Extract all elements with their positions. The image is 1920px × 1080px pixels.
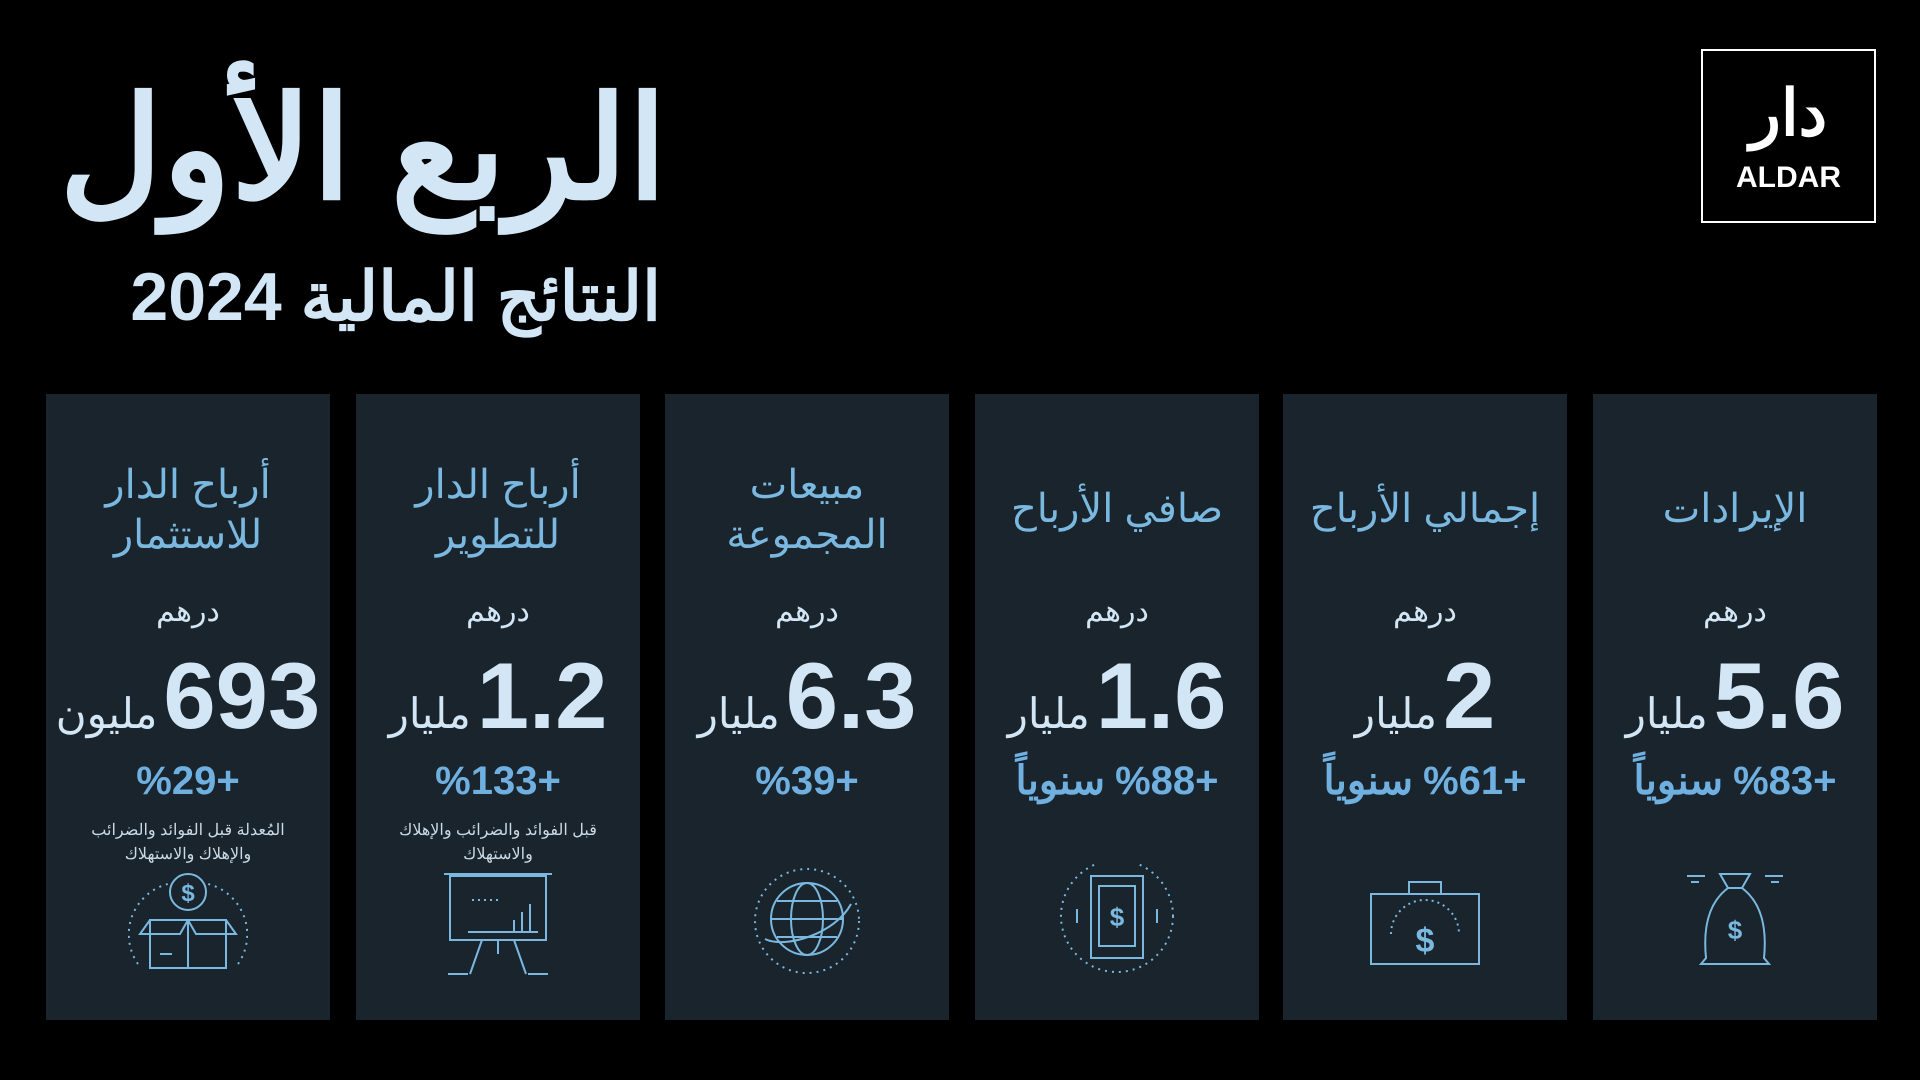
value: مليار [1355,690,1437,737]
icon: box with coin: $ [181,880,195,907]
growth [1322,751,1526,804]
card title: أرباح الدار [415,463,581,507]
icon: globe [754,868,860,974]
card title [104,458,271,558]
logo: Aldar: ALDAR [1736,161,1841,194]
card title: للاستثمار [114,513,262,557]
growth: %83+ [1733,759,1836,803]
value: مليار [1008,690,1090,737]
icon: money bag [1687,873,1783,965]
logo: Aldar [1701,49,1876,223]
growth: سنوياً [1016,759,1105,803]
value [386,643,607,748]
subtitle: النتائج المالية 2024 [130,259,661,335]
currency: درهم [1393,595,1457,628]
value: مليار [1626,690,1708,737]
icon: box with coin [128,873,248,969]
growth: %29+ [136,759,240,803]
panel: net profit [975,394,1259,1020]
currency: درهم [156,595,220,628]
icon: safe [1060,864,1174,973]
growth: سنوياً [1634,759,1723,803]
value: 2 [1443,643,1495,748]
value: مليار [389,690,471,737]
currency: درهم [1085,595,1149,628]
currency: درهم [466,595,530,628]
card title: مبيعات [750,463,864,507]
icon: briefcase: $ [1416,922,1435,960]
note: المُعدلة قبل الفوائد والضرائب [91,822,285,839]
value: 6.3 [786,643,916,748]
growth: %61+ [1423,759,1526,803]
panel: investment profit [46,394,330,1020]
growth [1014,751,1218,804]
currency: درهم [1703,595,1767,628]
value [1006,643,1226,748]
icon: safe: $ [1110,902,1125,932]
value: 693 [163,643,320,748]
icon: briefcase [1370,881,1480,965]
value [696,643,916,748]
value [1353,643,1495,748]
icon: presentation board [444,873,552,975]
note [399,822,597,863]
card title: أرباح الدار [105,463,271,507]
growth [1632,751,1836,804]
value [1624,643,1844,748]
value: 1.2 [477,643,607,748]
note: والاستهلاك [463,846,533,863]
value: 1.6 [1096,643,1226,748]
currency: درهم [775,595,839,628]
card title: للتطوير [436,513,560,557]
logo: Aldar: دار [1750,77,1827,149]
growth: %88+ [1115,759,1218,803]
note: قبل الفوائد والضرائب والإهلاك [399,822,597,839]
card title [726,463,888,558]
value: مليون [56,690,157,737]
panel: gross profit [1283,394,1567,1020]
card title: المجموعة [726,513,888,557]
card title: إجمالي الأرباح [1310,487,1540,531]
panel: revenue [1593,394,1877,1020]
growth: %39+ [755,759,859,803]
note [91,822,285,864]
card title: صافي الأرباح [1011,487,1223,531]
note: والإهلاك والاستهلاك [125,846,251,863]
icon: money bag: $ [1728,915,1743,945]
panel: group sales [665,394,949,1020]
growth: %133+ [435,759,561,803]
value: مليار [698,690,780,737]
card title [414,458,581,558]
panel: development profit [356,394,640,1020]
card title: الإيرادات [1663,487,1807,531]
value [56,643,320,748]
growth: سنوياً [1324,759,1413,803]
title: الربع الأول [59,70,667,229]
value: 5.6 [1714,643,1844,748]
